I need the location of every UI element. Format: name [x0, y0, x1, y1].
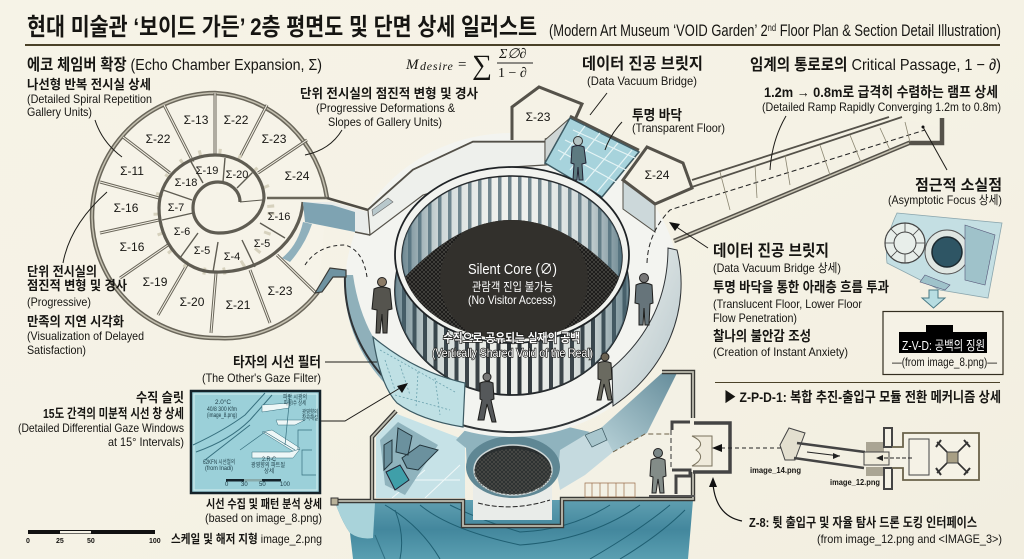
text: ramp detail: 1.2m → 0.8m로 급격히 수렴하는 램프 상세: [764, 84, 998, 100]
scale bar: 50: [87, 538, 95, 545]
text: spiral gallery: [27, 77, 152, 119]
lower funnel: [473, 478, 552, 520]
text: spiral gallery: (Detailed Spiral Repetition: [27, 92, 152, 106]
inset: gaze pattern map: 광영향의 파트될: [251, 461, 285, 469]
inset: gaze pattern map: 창곡해설: [302, 414, 318, 422]
text: spiral gallery: Gallery Units): [27, 105, 92, 119]
rotunda disc: [345, 133, 679, 437]
inset: gaze pattern map: 2.R-C: [262, 457, 277, 463]
gallery labels: Σ-16: [114, 201, 139, 215]
gallery labels: Σ-23: [268, 284, 293, 298]
gallery labels: Σ-20: [180, 295, 205, 309]
text: vertical slit: [18, 390, 184, 449]
inset: gaze pattern map: 50: [259, 482, 266, 488]
gallery labels: Σ-13: [184, 113, 209, 127]
title: [25, 14, 1001, 45]
text: bridge detail: 투명 바닥을 통한 아래층 흐름 투과: [713, 279, 889, 295]
text: gaze collection: 시선 수집 및 패턴 분석 상세: [206, 497, 322, 511]
gallery labels: Σ-22: [146, 132, 171, 146]
inset: gaze pattern map: (image_8.png): [207, 413, 237, 419]
gallery labels: Σ-5: [194, 245, 210, 257]
text: asymptotic focus: (Asymptotic Focus 상세): [888, 193, 1002, 207]
text: Z-8: Z-8: 튓 출입구 및 자율 탐사 드론 도킹 인터페이스: [749, 515, 977, 530]
title: nd: [768, 23, 776, 34]
corridor from gallery to rotunda: [282, 142, 545, 293]
text: Z-8: [749, 515, 1002, 546]
text: scale caption: 스케일 및 해저 지형 image_2.png: [171, 531, 322, 546]
gallery labels: Σ-24: [285, 169, 310, 183]
central drum with slats: [395, 167, 629, 395]
box: Z-V-D: Z-V-D: 공백의 징원: [902, 338, 985, 353]
gallery labels: Σ-11: [120, 164, 144, 178]
text: bridge detail: [713, 242, 889, 359]
gallery labels: Σ-16: [268, 211, 290, 223]
title: (Modern Art Museum ‘VOID Garden’ 2: [549, 21, 837, 40]
spiral wall: [159, 155, 303, 272]
scale bar: 100: [149, 538, 161, 545]
text: data vacuum bridge: 데이터 진공 브릿지: [582, 55, 703, 73]
outer slatted wall: [395, 185, 629, 395]
person: right walker: [635, 274, 653, 325]
text: ramp detail: [762, 84, 1001, 114]
text: gaze filter: [202, 354, 321, 385]
person on glass bridge: [571, 136, 586, 180]
bridge: transparent floor: [545, 116, 639, 197]
formula: =: [458, 57, 466, 73]
label: silent core: Silent Core (∅): [468, 261, 557, 278]
text: left progressive: 점진적 변형 및 경사: [27, 278, 127, 293]
heading: echo chamber: 에코 체임버 확장 (Echo Chamber Expansion, Σ): [27, 56, 322, 74]
inset: gaze pattern map: 30: [241, 482, 248, 488]
inset: gaze pattern map: 100: [280, 482, 291, 488]
disc outer edge: [345, 275, 679, 432]
label: shared void: [432, 330, 593, 360]
inset: gaze pattern map: [191, 391, 320, 493]
text: delayed satisfaction: Satisfaction): [27, 343, 86, 357]
formula: [405, 47, 533, 81]
ramp: critical passage: [672, 116, 942, 241]
inset: gaze pattern map: 광영향의: [302, 408, 318, 416]
text: vertical slit: 수직 슬릿: [136, 390, 184, 405]
diagram: module and drone: image_12.png: [830, 478, 880, 487]
text: bridge detail: 찰나의 불안감 조성: [713, 328, 811, 344]
detail illustration: asymptotic focus: [885, 213, 1002, 298]
pentagon gallery: sigma 23: Σ-23: [526, 110, 551, 124]
drone icon: [936, 440, 970, 475]
label: shared void: 수직으로 공유되는 실재의 공백: [443, 330, 580, 345]
inset: gaze pattern map: 62KFN 시선철의: [203, 458, 235, 466]
text: bridge detail: 데이터 진공 브릿지: [713, 242, 829, 260]
text: data vacuum bridge: (Data Vacuum Bridge): [587, 74, 697, 88]
well surround: [456, 425, 590, 484]
gallery labels: Σ-6: [174, 226, 190, 238]
text: delayed satisfaction: 만족의 지연 시각화: [27, 314, 124, 329]
pentagon gallery: sigma 24: [623, 147, 700, 263]
text: gaze collection: (based on image_8.png): [205, 511, 322, 525]
formula: desire: [420, 59, 454, 73]
gallery spokes: [100, 93, 315, 333]
text: vertical slit: 15도 간격의 미분적 시선 창 상세: [43, 406, 184, 421]
text: asymptotic focus: 점근적 소실점: [915, 177, 1002, 194]
scale bar: [26, 530, 161, 545]
person: left walker: [372, 278, 392, 333]
formula: M: [405, 57, 420, 73]
label: silent core: 관람객 진입 불가능: [472, 280, 553, 294]
inner slatted wall: [402, 176, 622, 338]
pentagon gallery: sigma 24: Σ-24: [645, 168, 670, 182]
text: gaze filter: (The Other's Gaze Filter): [202, 371, 321, 385]
gallery labels: [114, 113, 310, 312]
gallery labels: Σ-4: [224, 251, 240, 263]
text: progressive deformations: Slopes of Gallery Units): [328, 115, 442, 129]
gallery labels: Σ-18: [175, 177, 197, 189]
gallery labels: Σ-16: [120, 240, 145, 254]
gallery labels: Σ-19: [143, 275, 168, 289]
glass gaze filter panel: [373, 337, 465, 427]
text: vertical slit: at 15° Intervals): [108, 435, 184, 449]
arrow: Z-8 to dock: [709, 477, 742, 521]
text: delayed satisfaction: (Visualization of Delayed: [27, 329, 144, 343]
inset: gaze pattern map: 상세: [264, 467, 274, 475]
inset: gaze pattern map: 파란 시광의: [283, 393, 307, 401]
marker square: [331, 498, 338, 505]
label: silent core: (No Visitor Access): [468, 293, 556, 307]
text: bridge detail: (Translucent Floor, Lower Floor: [713, 297, 862, 311]
diagram: module and drone: [712, 428, 979, 489]
gallery labels: Σ-21: [226, 298, 251, 312]
person: far-right walker: [597, 353, 612, 400]
diagram: module and drone: image_14.png: [750, 466, 801, 475]
box: Z-V-D: —(from image_8.png)—: [892, 355, 997, 369]
rim: [395, 167, 629, 343]
text: progressive deformations: (Progressive Deformations &: [316, 101, 455, 115]
well collar: [466, 436, 560, 498]
leader lines: [63, 93, 947, 421]
text: vertical slit: (Detailed Differential Gaze Windows: [18, 421, 184, 435]
inset: gaze pattern map: 0: [225, 482, 229, 488]
gallery labels: Σ-22: [224, 113, 249, 127]
inset: gaze pattern map: (from Inadi): [205, 466, 233, 472]
gallery labels: Σ-5: [254, 238, 270, 250]
text: data vacuum bridge: [582, 55, 703, 88]
text: transparent floor: (Transparent Floor): [632, 121, 725, 135]
text: bridge detail: Flow Penetration): [713, 311, 797, 325]
inset: gaze pattern map: 2.0°C: [215, 400, 232, 406]
text: gaze collection: [205, 497, 322, 525]
text: progressive deformations: [300, 86, 478, 129]
gallery labels: Σ-19: [196, 165, 218, 177]
text: left progressive: (Progressive): [27, 295, 91, 309]
text: gaze filter: 타자의 시선 필터: [233, 354, 321, 370]
dock module: [585, 422, 730, 497]
text: transparent floor: [632, 107, 725, 135]
gallery labels: Σ-23: [262, 132, 287, 146]
box: Z-V-D: [883, 312, 1003, 374]
gallery labels: Σ-20: [226, 169, 248, 181]
arrowheads on leader lines: [397, 126, 924, 393]
dark well: [474, 445, 552, 495]
text: ramp detail: (Detailed Ramp Rapidly Converging 1.2m to 0.8m): [762, 100, 1001, 114]
formula: 1 − ∂: [498, 66, 527, 81]
arrow: down to Z-V-D: [922, 290, 945, 308]
section walls: [335, 372, 693, 526]
inset: gaze pattern map: 40/8 300 Kfm: [207, 407, 237, 413]
person: suited figure in section: [650, 448, 666, 493]
text: delayed satisfaction: [27, 314, 144, 357]
text: transparent floor: 투명 바닥: [632, 107, 682, 123]
formula: ∑: [472, 50, 492, 81]
text: left progressive: [27, 264, 127, 309]
water: [335, 500, 693, 559]
pentagon gallery: sigma 23: [512, 87, 582, 140]
text: bridge detail: (Data Vacuum Bridge 상세): [713, 261, 841, 275]
heading: critical passage: 임계의 통로로의 Critical Passage, 1 − ∂): [750, 56, 1001, 74]
inset: gaze pattern map: 파형/수 상세: [284, 399, 306, 407]
label: silent core: [468, 261, 557, 307]
text: Z-8: (from image_12.png and <IMAGE_3>): [817, 532, 1002, 546]
text: spiral gallery: 나선형 반복 전시실 상세: [27, 77, 151, 92]
scale bar: 25: [56, 538, 64, 545]
left parapet shading: [345, 275, 397, 403]
lower room: [376, 414, 465, 498]
gallery labels: Σ-7: [168, 202, 184, 214]
silent core void: [405, 220, 619, 339]
scale bar: 0: [26, 538, 30, 545]
title: 현대 미술관 ‘보이드 가든’ 2층 평면도 및 단면 상세 일러스트: [27, 14, 537, 41]
formula: Σ∅∂: [498, 47, 527, 62]
right cream room: [556, 373, 693, 500]
text: bridge detail: (Creation of Instant Anxiety): [713, 345, 848, 359]
text: asymptotic focus: [888, 177, 1002, 207]
person: front walker: [478, 373, 496, 422]
spiral gallery plan: [92, 93, 327, 338]
text: progressive deformations: 단위 전시실의 점진적 변형 및 경사: [300, 86, 478, 101]
lower section with water: [331, 372, 693, 559]
right parapet wall: [612, 248, 681, 406]
text: left progressive: 단위 전시실의: [27, 264, 97, 279]
label: shared void: (Vertically Shared Void of the Real): [432, 346, 593, 360]
